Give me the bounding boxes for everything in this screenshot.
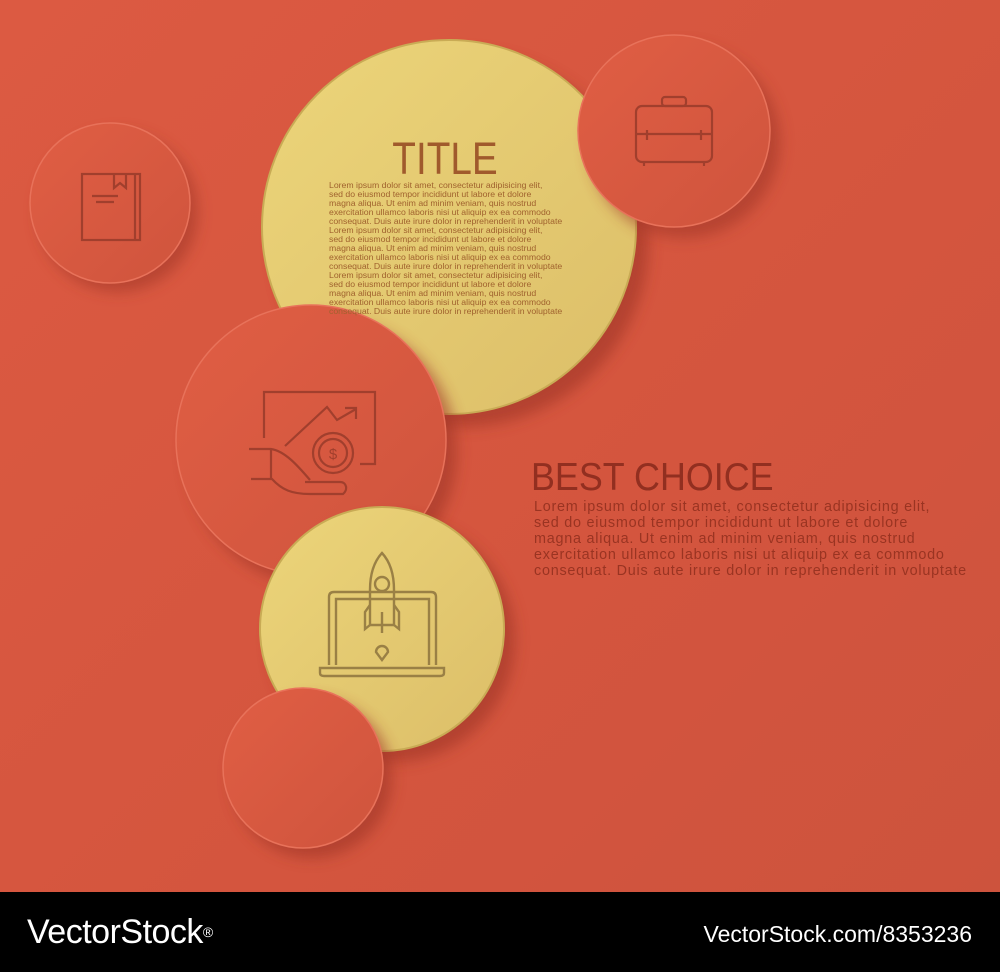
title: TITLE xyxy=(392,133,498,184)
icon: money growth xyxy=(249,392,375,494)
best choice text xyxy=(534,499,967,579)
icon: briefcase xyxy=(636,97,712,166)
footer logo: VectorStock® xyxy=(27,913,213,951)
title body text: exercitation ullamco laboris nisi ut aliquip ex ea commodo xyxy=(329,297,551,307)
title body text: Lorem ipsum dolor sit amet, consectetur adipisicing elit, xyxy=(329,180,542,190)
title body text: exercitation ullamco laboris nisi ut aliquip ex ea commodo xyxy=(329,252,551,262)
best choice text: exercitation ullamco laboris nisi ut aliquip ex ea commodo xyxy=(534,547,945,563)
title body text: sed do eiusmod tempor incididunt ut labore et dolore xyxy=(329,279,531,289)
title body text: Lorem ipsum dolor sit amet, consectetur adipisicing elit, xyxy=(329,270,542,280)
title body text: magna aliqua. Ut enim ad minim veniam, quis nostrud xyxy=(329,243,536,253)
best choice text: sed do eiusmod tempor incididunt ut labore et dolore xyxy=(534,515,908,531)
title body text: Lorem ipsum dolor sit amet, consectetur adipisicing elit, xyxy=(329,225,542,235)
best choice text: magna aliqua. Ut enim ad minim veniam, quis nostrud xyxy=(534,531,915,547)
title body text xyxy=(329,180,562,316)
circle: book xyxy=(30,123,198,292)
footer url: VectorStock.com/8353236 xyxy=(704,921,972,947)
title body text: consequat. Duis aute irure dolor in reprehenderit in voluptate xyxy=(329,261,562,271)
best choice text: consequat. Duis aute irure dolor in reprehenderit in voluptate xyxy=(534,563,967,579)
circle: rocket xyxy=(260,507,515,762)
icon: book xyxy=(82,174,140,240)
heading: best choice: BEST CHOICE xyxy=(531,456,774,499)
best choice text: Lorem ipsum dolor sit amet, consectetur adipisicing elit, xyxy=(534,499,930,515)
title body text: consequat. Duis aute irure dolor in reprehenderit in voluptate xyxy=(329,216,562,226)
circle: money: $ xyxy=(329,446,338,463)
title body text: consequat. Duis aute irure dolor in reprehenderit in voluptate xyxy=(329,306,562,316)
title body text: exercitation ullamco laboris nisi ut aliquip ex ea commodo xyxy=(329,207,551,217)
footer bar xyxy=(0,892,1000,972)
title body text: sed do eiusmod tempor incididunt ut labore et dolore xyxy=(329,189,531,199)
title body text: magna aliqua. Ut enim ad minim veniam, quis nostrud xyxy=(329,288,536,298)
circle: briefcase xyxy=(578,35,780,238)
title body text: magna aliqua. Ut enim ad minim veniam, quis nostrud xyxy=(329,198,536,208)
circle: small red xyxy=(223,688,392,858)
icon: rocket laptop xyxy=(320,553,444,676)
circle: money xyxy=(176,305,457,587)
title body text: sed do eiusmod tempor incididunt ut labore et dolore xyxy=(329,234,531,244)
circle: big yellow xyxy=(262,40,649,427)
